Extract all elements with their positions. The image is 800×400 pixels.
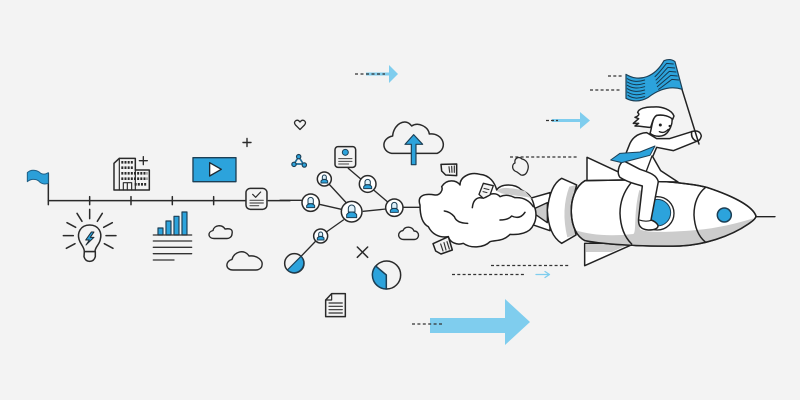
- antenna: [756, 215, 775, 219]
- bar chart: [153, 212, 192, 260]
- large pie: [372, 261, 401, 289]
- head: [650, 115, 672, 136]
- body window: [641, 197, 674, 230]
- icon: building: [114, 157, 149, 190]
- leg: [618, 161, 658, 230]
- icon: paper bottom: [433, 237, 452, 254]
- rocket: [571, 157, 775, 266]
- section rings: [620, 183, 706, 244]
- icon: plus: [243, 138, 251, 146]
- icon: share nodes: [292, 154, 306, 167]
- network diagram: [280, 122, 443, 317]
- lower fin: [585, 243, 635, 266]
- icon: paper in smoke: [479, 183, 493, 198]
- torso and far leg: [620, 132, 697, 182]
- icon: start flag: [27, 170, 48, 184]
- flag pole: [682, 88, 699, 144]
- necktie: [611, 146, 655, 163]
- rocket body: [571, 180, 756, 246]
- small cloud: [513, 158, 528, 175]
- icon: checklist: [246, 188, 267, 209]
- document: [326, 294, 345, 317]
- icon: video player: [193, 158, 236, 182]
- upper fin: [587, 157, 623, 182]
- x mark: [357, 247, 368, 257]
- man on rocket: [611, 60, 701, 230]
- icon: light bulb: [63, 209, 116, 261]
- speed dashes: [452, 76, 623, 274]
- rocket nozzle and rear: [527, 178, 577, 243]
- timeline: [27, 170, 290, 205]
- small arrow: [536, 272, 550, 278]
- top arrow: [355, 65, 398, 83]
- big arrow: [412, 299, 530, 345]
- hand: [691, 131, 701, 141]
- clouds left: [209, 226, 418, 270]
- face: [659, 129, 668, 132]
- small pie: [285, 254, 304, 273]
- smoke cloud: [419, 174, 536, 247]
- waving flag: [626, 60, 682, 101]
- user glyphs: [307, 175, 398, 240]
- user nodes: [302, 172, 403, 243]
- upload cloud: [384, 122, 443, 165]
- middle arrow: [546, 112, 590, 129]
- icon: paper top: [441, 164, 457, 176]
- icon: heart: [295, 120, 305, 130]
- hair: [633, 107, 674, 127]
- profile card: [335, 147, 356, 167]
- nose porthole: [717, 208, 731, 222]
- body shading: [575, 190, 753, 246]
